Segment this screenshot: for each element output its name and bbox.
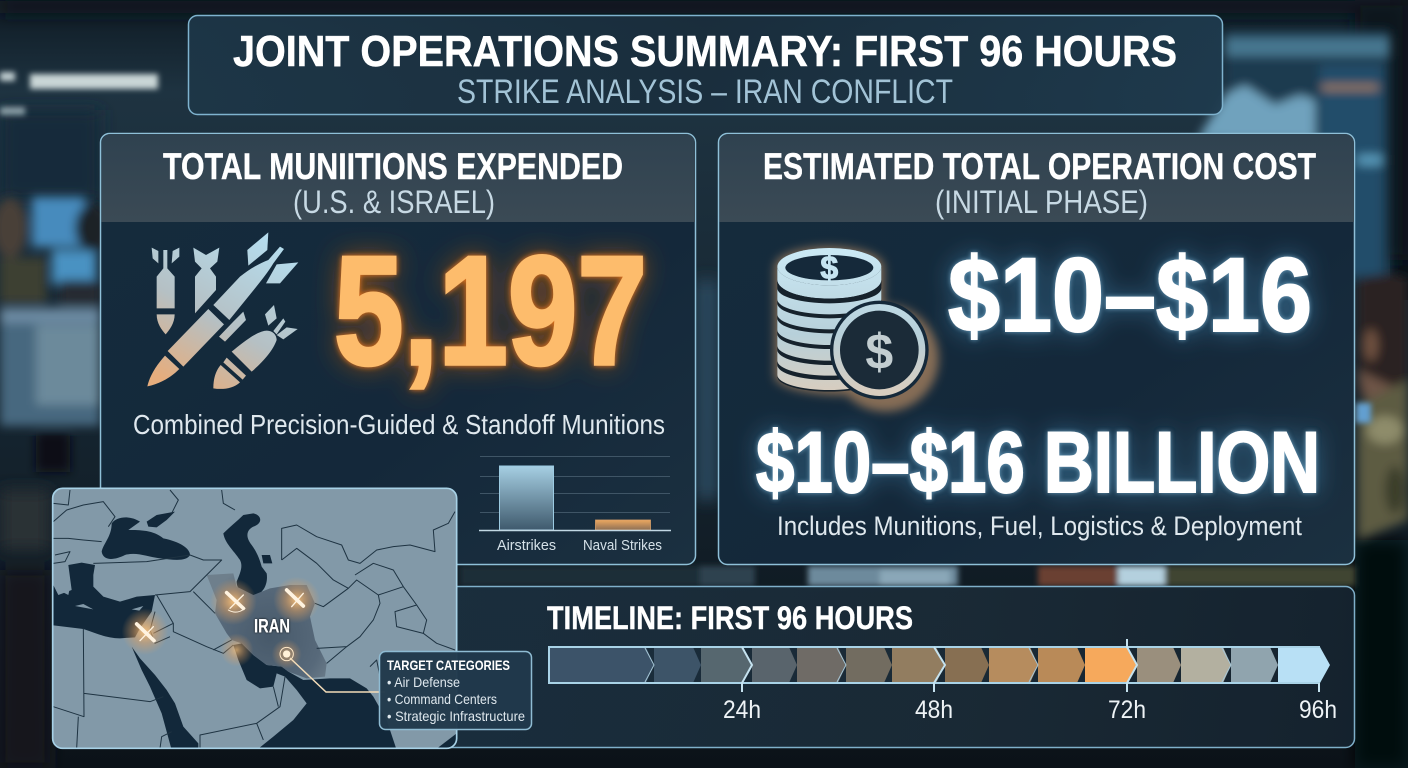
subtitle: STRIKE ANALYSIS – IRAN CONFLICT xyxy=(457,73,953,111)
label: 24h: 24h xyxy=(723,696,761,724)
islands xyxy=(64,590,144,611)
callout list: • Strategic Infrastructure xyxy=(387,708,525,724)
callout list: • Air Defense xyxy=(387,674,460,690)
label: naval strikes: Naval Strikes xyxy=(583,537,662,554)
title panel xyxy=(188,16,1222,114)
dollar sign coin: $ xyxy=(865,324,893,380)
bar chart: airstrikes vs naval strikes xyxy=(479,456,671,554)
label: 96h: 96h xyxy=(1299,696,1337,724)
icon: munitions xyxy=(147,232,298,389)
glow: strike markers xyxy=(122,577,320,669)
caption: cost: Includes Munitions, Fuel, Logistics & Deployment xyxy=(777,511,1302,541)
icon: strike marker west Iran xyxy=(227,593,245,612)
label: 72h: 72h xyxy=(1108,696,1146,724)
dollar sign top: $ xyxy=(820,250,838,286)
label: airstrikes: Airstrikes xyxy=(497,537,556,554)
subheading: U.S. and Israel: (U.S. & ISRAEL) xyxy=(293,184,495,220)
title: JOINT OPERATIONS SUMMARY: FIRST 96 HOURS xyxy=(233,27,1177,76)
label: 48h: 48h xyxy=(915,696,953,724)
panel: timeline xyxy=(400,586,1354,748)
callout heading: TARGET CATEGORIES xyxy=(387,657,510,673)
ceiling lights xyxy=(30,74,158,89)
label: Iran: IRAN xyxy=(254,616,290,637)
big number: 5,197: 5,197 xyxy=(334,224,647,397)
map: Middle East xyxy=(50,488,457,750)
person on right xyxy=(1358,274,1408,400)
country borders xyxy=(53,490,455,748)
band between panels xyxy=(700,566,755,586)
heading: timeline: TIMELINE: FIRST 96 HOURS xyxy=(547,600,913,636)
callout leader line xyxy=(290,658,385,692)
callout list xyxy=(387,674,525,724)
figure: $10–$16: $10–$16 xyxy=(948,237,1312,354)
panel: total munitions expended xyxy=(100,134,696,564)
Iran xyxy=(207,573,327,678)
icon: coin stack xyxy=(775,247,939,412)
bar: airstrikes xyxy=(500,466,554,530)
subheading: initial phase: (INITIAL PHASE) xyxy=(935,184,1148,220)
marker: target pin xyxy=(280,647,293,661)
chart: timeline chevron bar xyxy=(549,639,1330,692)
panel: estimated total operation cost xyxy=(718,134,1354,564)
seas xyxy=(50,512,457,750)
callout list: • Command Centers xyxy=(387,691,497,707)
left people and screens xyxy=(32,197,85,247)
top right monitor xyxy=(1225,30,1390,280)
icon: strike marker east Iran xyxy=(287,590,303,607)
heading: total munitions: TOTAL MUNIITIONS EXPENDED xyxy=(163,146,623,187)
bar: naval strikes xyxy=(596,520,650,530)
caption: munitions: Combined Precision-Guided & Standoff Munitions xyxy=(133,409,665,440)
left monitor xyxy=(0,308,100,426)
callout: target categories xyxy=(380,652,532,730)
icon: strike marker Israel xyxy=(137,624,154,641)
